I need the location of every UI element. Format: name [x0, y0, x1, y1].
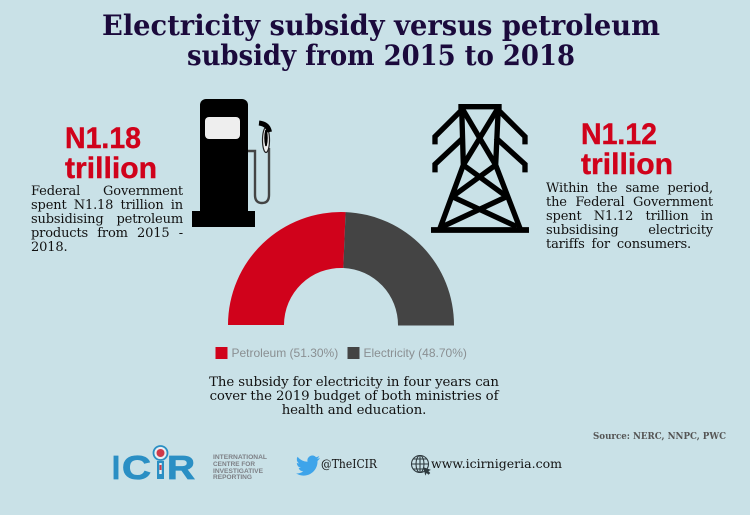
text block: petroleum subsidy description: products from 2015 - — [31, 226, 183, 241]
ICIR logo tagline: CENTRE FOR — [213, 462, 256, 468]
source note: Source: NERC, NNPC, PWC — [593, 431, 726, 442]
text block: chart takeaway: health and education. — [282, 403, 426, 418]
text block: electricity subsidy description — [546, 181, 714, 252]
title — [102, 9, 660, 72]
text block: petroleum subsidy description: 2018. — [31, 240, 67, 255]
ICIR logo: R — [167, 449, 195, 486]
icon: fuel pump — [192, 99, 270, 227]
ICIR logo: I — [112, 449, 120, 486]
ICIR logo tagline: REPORTING — [213, 475, 252, 481]
chart segment: electricity — [343, 212, 454, 326]
website url: www.icirnigeria.com — [431, 456, 562, 471]
chart segment: petroleum — [228, 212, 346, 325]
title: subsidy from 2015 to 2018 — [187, 39, 575, 72]
ICIR logo tagline: INTERNATIONAL — [213, 455, 267, 461]
ICIR logo: C — [122, 449, 151, 486]
text block: petroleum subsidy description — [31, 184, 183, 255]
text block: petroleum subsidy description: spent N1.18 trillion in — [31, 198, 183, 213]
half-donut chart — [228, 212, 454, 326]
ICIR logo tagline: INVESTIGATIVE — [213, 469, 263, 475]
text block: electricity subsidy description: the Federal Government — [546, 195, 713, 210]
headline: N1.12 trillion: N1.12 — [581, 118, 657, 151]
headline: N1.18 trillion — [65, 122, 157, 185]
text block: chart takeaway: cover the 2019 budget of both ministries of — [210, 389, 498, 404]
text block: electricity subsidy description: spent N1.12 trillion in — [546, 209, 713, 224]
text block: chart takeaway: The subsidy for electricity in four years can — [209, 375, 499, 390]
headline: N1.12 trillion — [581, 118, 673, 181]
text block: electricity subsidy description: tariffs for consumers. — [546, 237, 691, 252]
ICIR logo tagline — [213, 455, 267, 481]
twitter handle: @TheICIR — [321, 456, 378, 471]
headline: N1.18 trillion: N1.18 — [65, 122, 141, 155]
chart legend — [216, 346, 467, 360]
text block: petroleum subsidy description: Federal Government — [31, 184, 183, 199]
icon: electricity pylon — [431, 107, 529, 230]
chart legend: Electricity (48.70%) — [364, 346, 467, 360]
title: Electricity subsidy versus petroleum — [102, 9, 660, 42]
text block: chart takeaway — [209, 375, 500, 418]
headline: N1.18 trillion: trillion — [65, 152, 157, 185]
icon: twitter bird — [296, 455, 320, 476]
headline: N1.12 trillion: trillion — [581, 148, 673, 181]
text block: petroleum subsidy description: subsidising petroleum — [31, 212, 183, 227]
icon: globe with cursor — [412, 456, 430, 474]
ICIR logo — [112, 446, 195, 486]
text block: electricity subsidy description: Within the same period, — [546, 181, 713, 196]
text block: electricity subsidy description: subsidising electricity — [546, 223, 713, 238]
chart legend: Petroleum (51.30%) — [232, 346, 338, 360]
